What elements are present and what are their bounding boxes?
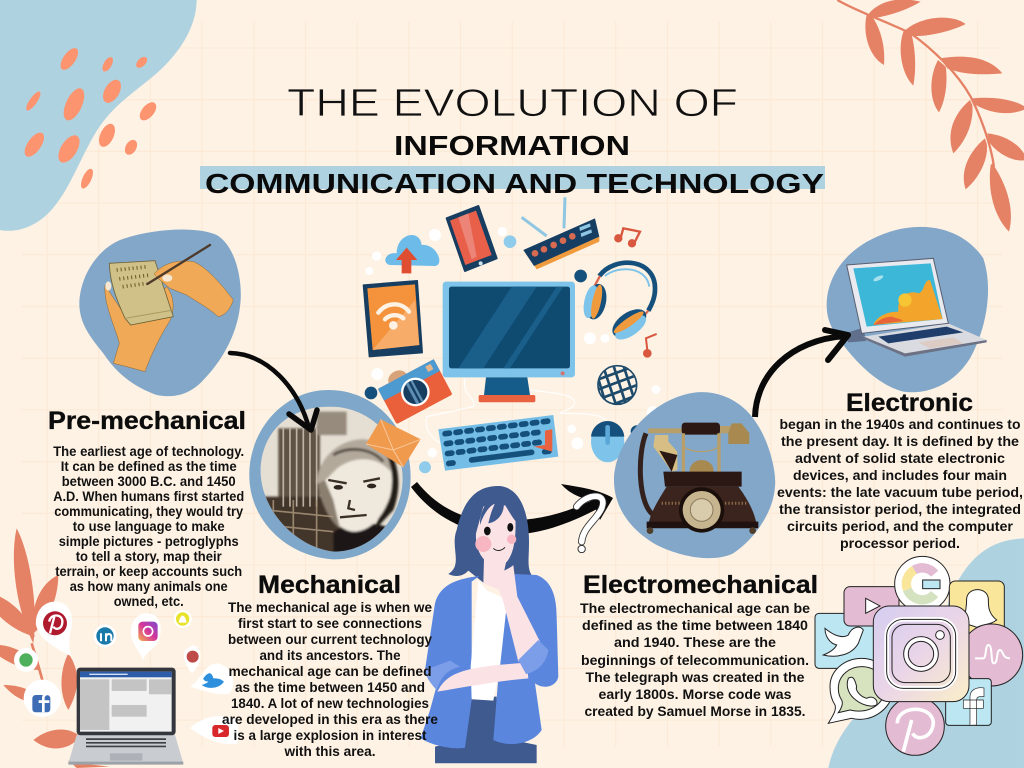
heading: electronic: Electronic <box>846 389 973 417</box>
text: electronic description: the present day. It is defined by the <box>781 434 1019 449</box>
text: electronic description: devices, and includes four main <box>793 468 1007 483</box>
text: pre-mechanical description: between 3000 B.C. and 1450 <box>62 474 236 489</box>
icon: whatsapp <box>14 648 38 672</box>
text: mechanical description: mechanical age can be defined <box>228 664 432 679</box>
text: mechanical description: The mechanical age is when we <box>228 600 432 615</box>
panel: central devices illustration <box>363 197 660 473</box>
panel: pre-mechanical image <box>79 230 241 396</box>
icon: google plus <box>184 645 201 673</box>
icon: monitor <box>443 282 575 402</box>
text: pre-mechanical description: The earliest age of technology. <box>53 444 244 459</box>
wires <box>426 378 607 447</box>
text: electromechanical description: defined as the time between 1840 <box>582 618 808 633</box>
text: electronic description: the transistor period, the integrated <box>779 502 1021 517</box>
icon: cloud upload <box>385 235 439 273</box>
text: pre-mechanical description: A.D. When humans first started <box>53 489 244 504</box>
icon: envelope <box>366 419 421 467</box>
text: mechanical description <box>222 600 438 759</box>
icon: facebook <box>24 680 61 717</box>
blob <box>827 227 988 392</box>
text: electronic description: advent of solid state electronic <box>795 451 1005 466</box>
text: mechanical description: and its ancestors. The <box>260 648 401 663</box>
panel: mechanical portrait image <box>249 390 411 559</box>
text: electromechanical description: The electromechanical age can be <box>580 601 810 616</box>
arrow: mechanical to electromechanical <box>411 482 613 535</box>
text: mechanical description: is a large explosion in interest <box>234 728 427 743</box>
text: electronic description <box>777 417 1023 551</box>
panel: social media icon cluster <box>815 556 1023 755</box>
text: electromechanical description: and 1940. These are the <box>614 635 776 650</box>
icon: pinterest pin <box>36 602 72 657</box>
text: electronic description: events: the late vacuum tube period, <box>777 485 1023 500</box>
decoration: top-left blue blob with orange dabs <box>0 0 197 231</box>
text: mechanical description: are developed in this era as there <box>222 712 438 727</box>
icon: hand writing on clay tablet <box>105 245 233 372</box>
title: THE EVOLUTION OF <box>287 82 738 125</box>
text: pre-mechanical description <box>53 444 244 609</box>
arrow: pre-mechanical to mechanical <box>230 353 317 430</box>
cuffs <box>425 640 548 690</box>
text: electromechanical description: created by Samuel Morse in 1835. <box>584 704 806 719</box>
text: pre-mechanical description: to tell a story, map their <box>76 549 222 564</box>
text: electronic description: circuits period, and the computer <box>787 519 1014 534</box>
jacket <box>421 574 558 748</box>
icon: router <box>522 197 599 269</box>
title: COMMUNICATION AND TECHNOLOGY <box>205 168 824 199</box>
panel: electronic laptop image <box>827 227 988 392</box>
text: electronic description: processor period. <box>840 536 960 551</box>
icon: globe <box>597 364 638 406</box>
text: electromechanical description: beginnings of telecommunication. <box>581 653 809 668</box>
icon: camera <box>374 353 453 424</box>
text: electromechanical description <box>580 601 810 719</box>
text: pre-mechanical description: to use language to make <box>73 519 225 534</box>
icon: whatsapp bubble <box>828 658 893 723</box>
text: pre-mechanical description: It can be defined as the time <box>61 459 237 474</box>
heading: mechanical: Mechanical <box>258 571 401 599</box>
text: mechanical description: as the time between 1450 and <box>235 680 425 695</box>
decoration: top-right leaf branch <box>837 0 1024 232</box>
decoration: bottom-right blue blob <box>828 538 1024 768</box>
icon: smartphone <box>447 206 497 271</box>
icon: rotary telephone <box>640 423 758 534</box>
text: mechanical description: with this area. <box>283 744 376 759</box>
icon: tablet wifi <box>363 281 422 357</box>
text: mechanical description: first start to see connections <box>238 616 422 631</box>
text: electromechanical description: early 1800s. Morse code was <box>598 687 792 702</box>
icon: facebook card <box>946 679 991 725</box>
icon: linkedin <box>94 625 116 647</box>
text: mechanical description: between our current technology <box>228 632 432 647</box>
icon: headphones <box>581 263 655 344</box>
neck and face <box>476 504 516 590</box>
icon: laptop <box>845 258 987 357</box>
illustration: thinking woman <box>421 486 603 763</box>
text: pre-mechanical description: as how many animals one <box>70 579 228 594</box>
text: pre-mechanical description: terrain, or keep accounts such <box>55 564 242 579</box>
blob <box>614 392 775 558</box>
question mark <box>577 496 603 553</box>
text: mechanical description: 1840. A lot of new technologies <box>231 696 429 711</box>
icon: instagram large <box>873 606 969 702</box>
text: electronic description: began in the 1940s and continues to <box>780 417 1020 432</box>
arrow: electromechanical to electronic <box>755 330 848 417</box>
text: pre-mechanical description: owned, etc. <box>114 594 184 609</box>
trousers <box>435 697 537 763</box>
icon: twitter <box>190 663 233 694</box>
heading: pre-mechanical: Pre-mechanical <box>48 407 246 435</box>
blob ring <box>249 390 411 559</box>
blob <box>79 230 241 396</box>
icon: keyboard <box>438 415 558 471</box>
icon: laptop <box>68 668 183 765</box>
text: pre-mechanical description: simple pictures - petroglyphs <box>59 534 239 549</box>
arm <box>495 565 540 662</box>
heading: electromechanical: Electromechanical <box>583 571 818 599</box>
shirt <box>471 581 507 701</box>
text: electromechanical description: The telegraph was created in the <box>586 670 805 685</box>
icon: music note small <box>643 334 657 358</box>
icon: mouse <box>591 421 624 462</box>
fringe <box>480 493 516 525</box>
hair <box>448 486 533 583</box>
icon: youtube <box>190 716 238 744</box>
icon: twitter card <box>815 613 875 668</box>
icon: audio wave circle <box>961 624 1023 686</box>
icon: snapchat <box>174 610 192 628</box>
icon cluster: social media icons and laptop <box>14 602 238 765</box>
photo: babbage and engine <box>257 403 407 557</box>
title <box>200 82 825 199</box>
decoration: bottom-left leaves <box>0 528 110 768</box>
icon: youtube card <box>844 587 899 626</box>
icon: google <box>895 556 950 612</box>
icon: music note large <box>615 228 640 246</box>
icon: instagram pin <box>131 613 161 660</box>
text: pre-mechanical description: communicating, they would try <box>54 504 244 519</box>
panel: electromechanical telephone image <box>614 392 775 558</box>
icon: pinterest circle <box>886 697 944 755</box>
icon: snapchat card <box>949 581 1004 636</box>
title: INFORMATION <box>394 130 630 161</box>
dots <box>365 227 660 473</box>
